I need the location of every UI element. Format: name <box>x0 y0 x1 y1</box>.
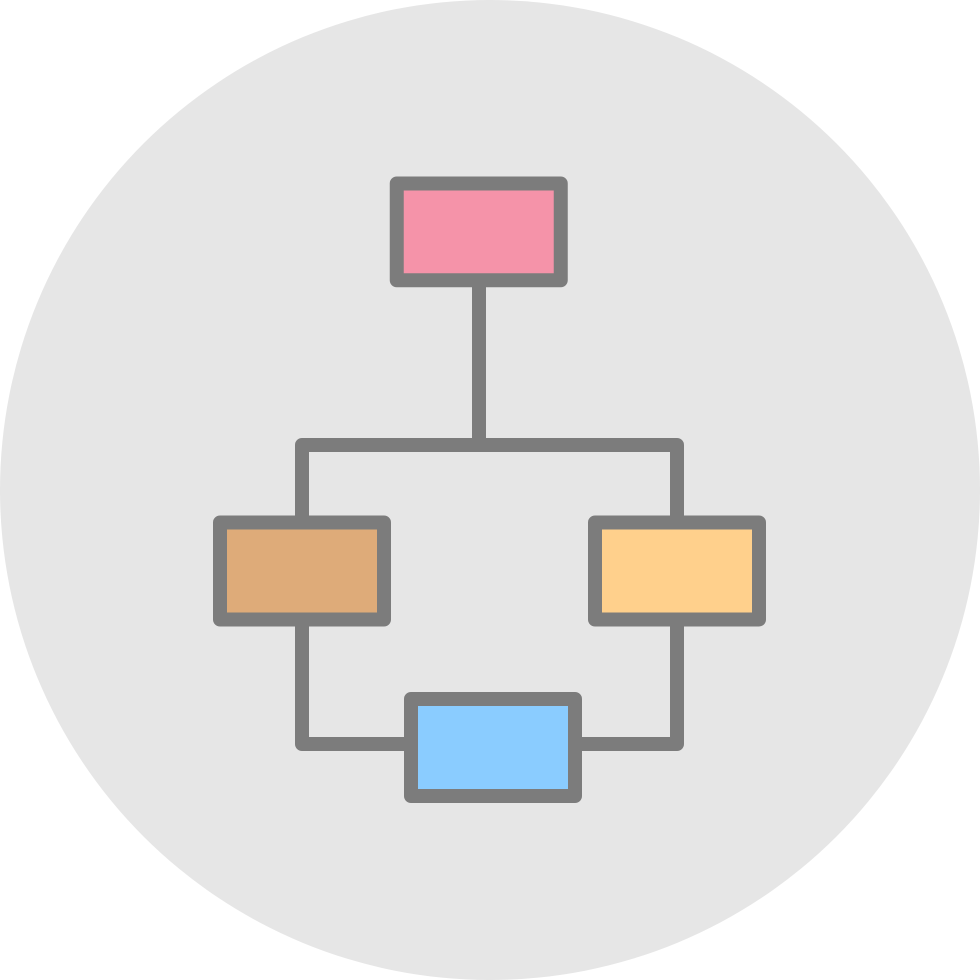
connectors <box>302 281 677 744</box>
box: bottom blue <box>411 699 575 796</box>
box: right yellow <box>595 522 759 620</box>
box: left tan <box>220 522 384 620</box>
box: top pink <box>397 184 561 280</box>
